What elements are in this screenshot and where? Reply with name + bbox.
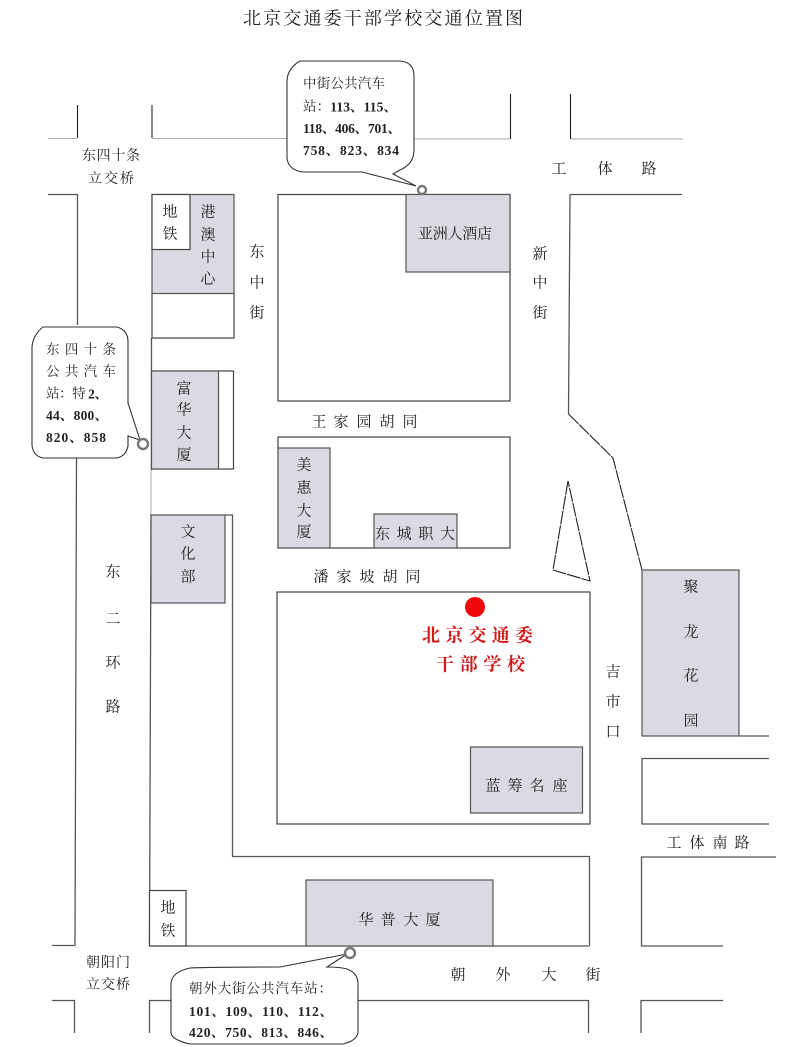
building: 富华大厦 [152, 371, 234, 469]
label: 东二环路: 环 [105, 654, 121, 672]
building: 聚龙花园: 园 [683, 712, 699, 730]
building: 华普大厦: 厦 [425, 912, 441, 928]
label: 朝外大街 [450, 966, 601, 984]
callout: 中街 bus stop [287, 61, 426, 194]
callout: 朝外大街 bus stop: 朝外大街公共汽车站： [189, 980, 332, 996]
callout: 中街 bus stop: 中街公共汽车 [303, 75, 385, 91]
building: 文化部: 化 [180, 546, 196, 562]
label: 东二环路 [105, 564, 121, 716]
callout: 东四十条 bus stop: 820、858 [46, 430, 106, 445]
building: 华普大厦: 普 [380, 912, 396, 928]
label: 新中街: 新 [532, 246, 548, 262]
label: 东四十条立交桥 [82, 148, 140, 187]
label: 东二环路: 东 [105, 564, 121, 580]
label: 工体路 [551, 160, 657, 178]
label: 潘家坡胡同 [313, 568, 421, 586]
building: 聚龙花园: 龙 [683, 624, 699, 640]
label: 王家园胡同: 王 [311, 414, 327, 430]
block with school and 蓝筹名座: 名 [529, 778, 545, 794]
label: 潘家坡胡同: 同 [405, 568, 421, 586]
label: 王家园胡同: 同 [402, 414, 418, 430]
building: 聚龙花园: 花 [683, 666, 699, 684]
label: 吉市口: 吉 [605, 664, 621, 680]
label: 王家园胡同: 胡 [379, 412, 395, 430]
label: 朝外大街: 朝 [450, 966, 466, 984]
building: 华普大厦 [306, 880, 493, 946]
label: 新中街: 中 [532, 274, 548, 292]
block with 美惠大厦 and 东城职大: 美 [296, 456, 312, 474]
block with school and 蓝筹名座: 蓝 [485, 776, 501, 794]
callout: 中街 bus stop: 118、406、701、 [303, 121, 401, 136]
block with school and 蓝筹名座: 筹 [507, 778, 523, 794]
callout: 东四十条 bus stop [32, 327, 148, 458]
block with 美惠大厦 and 东城职大: 惠 [296, 478, 312, 496]
label: 朝阳门立交桥: 朝阳门 [86, 954, 130, 971]
building: 聚龙花园: 聚 [683, 578, 699, 596]
label: 东中街: 中 [249, 274, 265, 292]
label: 工体路: 路 [641, 160, 657, 178]
label: 东二环路: 路 [105, 698, 121, 716]
label: 工体路: 工 [551, 162, 567, 178]
building: 文化部 [151, 515, 225, 603]
building: 文化部: 文 [180, 524, 196, 540]
callout: 东四十条 bus stop: 东四十条 [46, 342, 116, 357]
label: 朝阳门立交桥 [86, 954, 130, 993]
label: 吉市口: 口 [605, 724, 621, 740]
label: 新中街 [532, 246, 548, 322]
label: 吉市口 [605, 664, 621, 740]
building: 港澳中心 with metro: 地 [162, 202, 178, 220]
building: 港澳中心 with metro: 心 [200, 270, 216, 288]
callout: 朝外大街 bus stop: 420、750、813、846、 [189, 1025, 333, 1040]
building: 华普大厦: 华 [358, 912, 374, 928]
building: 文化部: 部 [180, 568, 196, 586]
building: 港澳中心 with metro [152, 194, 234, 338]
building: 富华大厦: 厦 [176, 446, 192, 464]
building: 港澳中心 with metro: 中 [200, 248, 216, 266]
block with 美惠大厦 and 东城职大 [278, 437, 510, 548]
label: 工体南路 [666, 834, 750, 852]
school name [422, 624, 534, 674]
callout: 东四十条 bus stop: 公共汽车 [46, 364, 116, 379]
label: 工体路: 体 [597, 160, 613, 178]
label: 朝外大街: 外 [495, 966, 511, 984]
school name: 北京交通委 [422, 624, 534, 646]
label: 潘家坡胡同: 家 [336, 568, 352, 586]
label: 王家园胡同: 家 [333, 414, 349, 430]
building: 聚龙花园 [642, 570, 739, 736]
school location marker [465, 597, 485, 617]
block with 美惠大厦 and 东城职大: 大 [296, 502, 312, 520]
label: 工体南路: 路 [734, 834, 750, 852]
label: 朝外大街: 街 [585, 966, 601, 984]
callout: 朝外大街 bus stop: 101、109、110、112、 [189, 1004, 333, 1019]
building: 富华大厦: 华 [176, 402, 192, 418]
block with 美惠大厦 and 东城职大: 东城职大 [375, 526, 455, 542]
label: 工体南路: 工 [666, 836, 682, 852]
block with 亚洲人酒店 [278, 194, 510, 401]
building: 富华大厦: 富 [176, 380, 192, 398]
label: 王家园胡同 [311, 412, 418, 430]
label: 东中街: 街 [249, 304, 265, 322]
metro station south: 地 [160, 898, 176, 916]
label: 潘家坡胡同: 潘 [313, 568, 329, 586]
callout: 朝外大街 bus stop [171, 948, 358, 1044]
label: 王家园胡同: 园 [356, 414, 372, 430]
building: 港澳中心 with metro: 港 [200, 204, 216, 220]
building: 华普大厦: 大 [403, 912, 419, 928]
label: 朝外大街: 大 [541, 966, 557, 984]
label: 东二环路: 二 [105, 612, 121, 628]
block with 美惠大厦 and 东城职大: 厦 [296, 524, 312, 540]
label: 新中街: 街 [532, 304, 548, 322]
label: 潘家坡胡同: 胡 [382, 568, 398, 586]
callout: 中街 bus stop: 站：113、115、 [303, 98, 397, 114]
label: 潘家坡胡同: 坡 [359, 568, 375, 586]
building: 港澳中心 with metro: 铁 [162, 226, 178, 242]
label: 东四十条立交桥: 立交桥 [88, 170, 134, 187]
block with school and 蓝筹名座 [277, 592, 590, 824]
callout: 中街 bus stop: 758、823、834 [303, 143, 399, 158]
callout: 东四十条 bus stop: 44、800、 [46, 408, 108, 423]
block with 亚洲人酒店: 亚洲人酒店 [418, 226, 492, 242]
metro station south [150, 890, 186, 946]
block with school and 蓝筹名座: 座 [552, 778, 568, 794]
building: 富华大厦: 大 [176, 424, 192, 442]
label: 工体南路: 体 [689, 834, 705, 852]
metro station south: 铁 [160, 922, 176, 940]
title: 北京交通委干部学校交通位置图 [243, 8, 523, 28]
label: 东中街: 东 [249, 244, 265, 260]
building: 港澳中心 with metro: 澳 [200, 226, 216, 244]
callout: 东四十条 bus stop: 站：特 2、 [46, 385, 108, 401]
label: 东四十条立交桥: 东四十条 [82, 148, 140, 164]
label: 朝阳门立交桥: 立交桥 [86, 976, 130, 993]
school name: 干部学校 [436, 654, 527, 674]
label: 东中街 [249, 244, 265, 322]
label: 工体南路: 南 [712, 834, 728, 852]
label: 吉市口: 市 [605, 694, 621, 710]
